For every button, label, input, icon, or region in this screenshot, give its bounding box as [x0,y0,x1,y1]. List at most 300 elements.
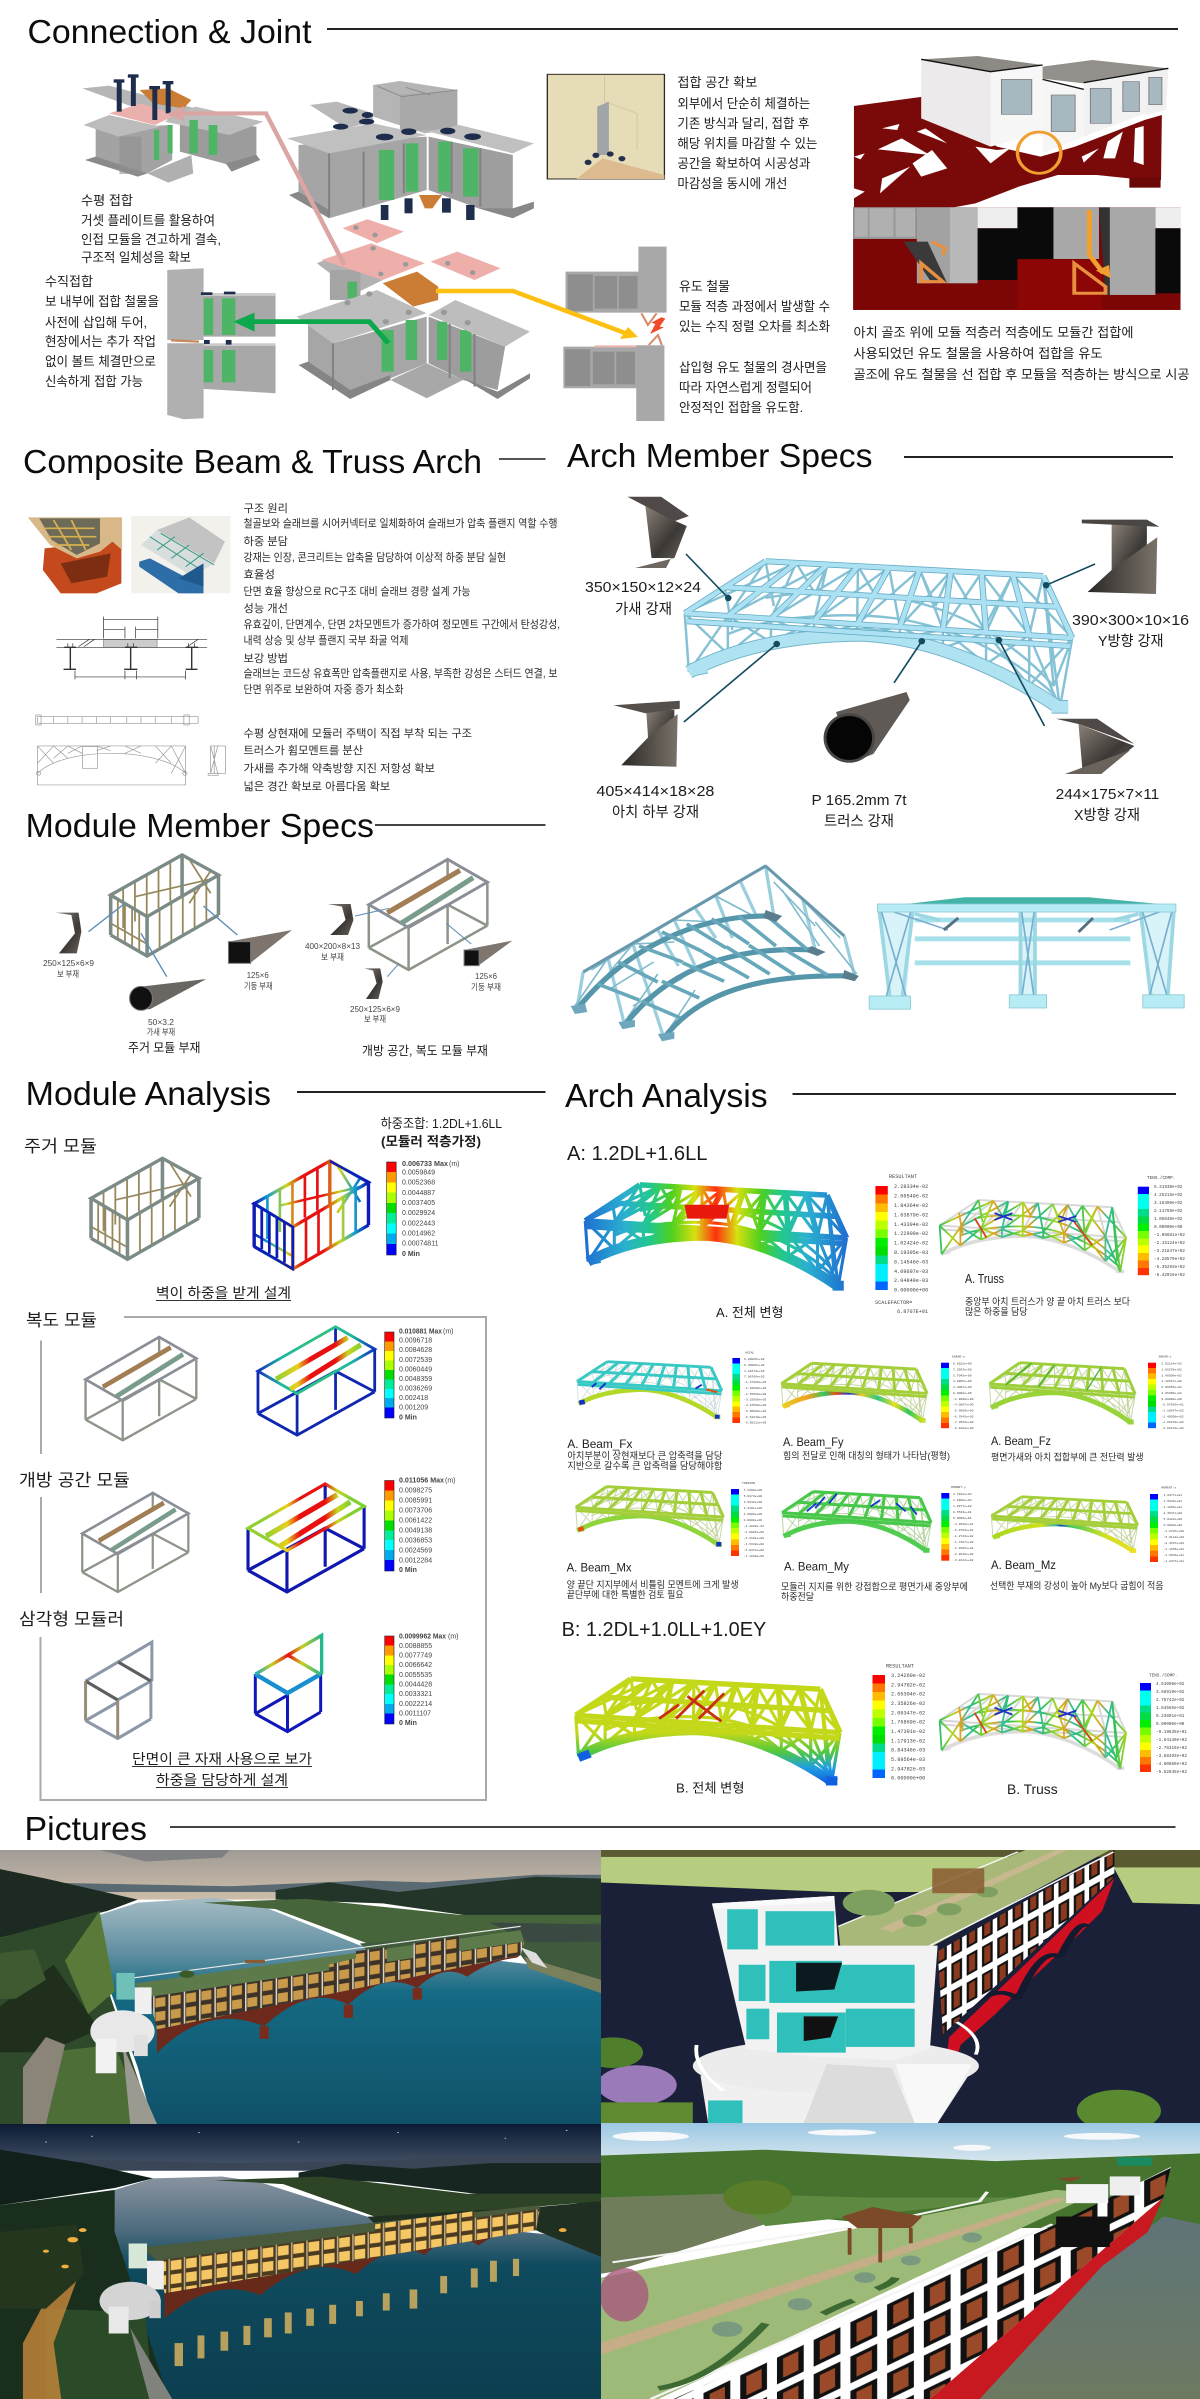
caption: B overall: B. 전체 변형 [676,1781,744,1796]
legend: corridor module: 0.0048359 [399,1376,432,1383]
legend: beam My: -3.8412e+02 [953,1558,974,1562]
text: composite principles: 내력 상승 및 상부 플랜지 국부 좌굴 억제 [244,634,408,647]
text: member labels: Y방향 강재 [1098,633,1164,650]
legend: residential module: 0.0014962 [402,1230,435,1238]
legend: beam Fx: 6.20895e+03 [744,1357,765,1361]
legend: open space module [385,1478,456,1574]
panel: upper exploded joint [287,81,534,220]
text: beam My: 하중전달 [781,1591,814,1603]
legend: residential module: 0.00074811 [402,1240,439,1248]
legend: beam Mx: -5.9374e+00 [744,1548,764,1552]
text: residential member labels: 50×3.2 [148,1017,174,1027]
text: member labels: 405×414×18×28 [596,784,714,800]
text: beam Fx: A. Beam_Fx [567,1437,632,1451]
legend: B truss: -4.60669e+02 [1156,1762,1187,1767]
legend: open space module: 0.011056 Max [399,1478,444,1484]
legend: beam Fy: 5.7045e+00 [953,1374,972,1378]
chart: corridor module deformation [258,1327,375,1435]
image: composite deck blue beam [131,516,230,593]
legend: residential module: (m) [449,1161,460,1168]
icon: residential column section [228,930,292,963]
legend: beam My: MOMENT-y [951,1485,966,1489]
legend: A overall: 2.04849e-03 [894,1278,928,1284]
text: member labels: 350×150×12×24 [585,580,701,596]
legend: corridor module: 0.001209 [399,1404,428,1412]
text: member labels: P 165.2mm 7t [812,793,906,809]
legend: open space module: 0.0036853 [399,1538,432,1544]
legend: B truss: -9.19635e+01 [1156,1730,1187,1735]
legend: B overall: 3.24260e-02 [891,1673,925,1679]
text: member labels: 아치 하부 강재 [612,804,699,821]
legend: corridor module: 0.010881 Max [399,1328,442,1336]
text: arch module stacking: 사용되었던 유도 철물을 사용하여 접합을 유도 [854,346,1103,361]
chart: beam Mz [991,1497,1138,1551]
legend: beam Fz [1148,1354,1184,1430]
legend: B overall: 5.89564e-03 [891,1757,925,1763]
chart: beam My [782,1492,931,1551]
legend: beam Fz: SHEAR-z [1158,1354,1172,1358]
legend: corridor module: 0.0084628 [399,1347,432,1354]
text: residential member labels: 기둥 부재 [244,981,273,991]
legend: B truss: -5.52845e+02 [1156,1770,1187,1775]
legend: residential module [387,1161,460,1258]
legend: beam Mz: -1.6707e+00 [1164,1529,1184,1533]
panel: horizontal joint model with bolts [82,74,263,183]
text: residential member labels: 보 부재 [57,969,79,979]
legend: beam My: -1.2743e+02 [953,1534,974,1538]
text: joint space [677,75,817,191]
legend: beam Fy: 4.0965e+00 [953,1379,972,1383]
leader lines to members [684,554,1095,726]
legend: A overall: RESULTANT [889,1174,917,1180]
chart: arch truss model [685,561,1072,708]
label: corridor module: 복도 모듈 [26,1311,97,1330]
legend: beam My: -2.3305e+02 [953,1546,974,1550]
legend: beam Fx: 7.08700e+02 [744,1374,765,1378]
legend: triangular module: 0 Min [399,1720,417,1727]
legend: beam Fy: 8.8182e+00 [953,1362,972,1366]
legend: corridor module: 0.0036269 [399,1386,432,1392]
legend: beam Fz: 0.00000e+00 [1161,1397,1182,1401]
legend: triangular module: (m) [448,1634,458,1640]
text: beam Mz: A. Beam_Mz [991,1558,1056,1572]
legend: beam Mx: -3.3101e+00 [744,1536,764,1540]
text: beam Fx: 아치부분이 상현재보다 큰 압축력을 담당 [567,1450,723,1462]
open module leaders [355,908,471,977]
text: guide fitting: 있는 수직 정렬 오차를 최소화 [679,319,830,334]
diagram: composite section [56,617,207,679]
legend: A truss: -6.42016e+02 [1154,1273,1185,1278]
legend: open space module: 0.0085991 [399,1498,432,1504]
icon: member 350x150 section [628,497,689,568]
legend: beam Fx [732,1350,766,1424]
legend: beam Fz: -1.40508e+02 [1161,1414,1184,1418]
legend: B truss: 3.68919e+02 [1156,1690,1185,1695]
legend: triangular module: 0.0033321 [399,1691,432,1698]
legend: A overall: 0.00000e+00 [894,1288,928,1294]
legend: B truss: TENS./COMP. [1149,1674,1177,1678]
chart: beam Fy [781,1363,927,1421]
image: night aerial view of bridge [0,2124,601,2399]
text: guide fitting: 따라 자연스럽게 정렬되어 [679,380,812,395]
chart: open space module model [82,1493,188,1592]
text: vertical joint: 없이 볼트 체결만으로 [45,354,156,369]
legend: beam Mz [1150,1486,1184,1563]
legend: open space module: (m) [445,1478,456,1484]
legend: beam Mz: -8.3537e+00 [1164,1541,1184,1545]
text: beam Fy: A. Beam_Fy [783,1435,844,1449]
legend: A truss: -2.15124e+02 [1154,1241,1185,1246]
text: member labels: 트러스 강재 [824,813,894,830]
legend: B truss: -2.76316e+02 [1156,1746,1187,1751]
legend: beam Fx: -3.15900e+03 [744,1398,766,1402]
legend: beam Fz: 6.95565e+01 [1161,1385,1182,1389]
arrow: green pin [233,313,388,343]
text: composite principles: 하중 분담 [244,534,288,548]
text: beam Fx [567,1437,723,1472]
legend: beam Mx: -1.8905e+00 [744,1530,764,1534]
chart: arch underside view [571,866,859,1041]
text: vertical joint: 신속하게 접합 가능 [45,374,143,389]
text: beam Mx: A. Beam_Mx [567,1561,632,1575]
heading: Arch Analysis: Arch Analysis [565,1077,768,1114]
text: beam Mz [990,1558,1164,1592]
legend: beam Fx: -1.37460e+03 [744,1380,766,1384]
text: guide fitting: 유도 철물 [679,279,730,294]
panel: gusset plates and lower joint [297,219,530,399]
text: member labels: 244×175×7×11 [1056,787,1159,803]
legend: beam My: -1.7387e+02 [953,1540,974,1544]
icon: open module column section [464,941,512,966]
legend: A overall [875,1174,928,1315]
text: member labels: 가새 강재 [615,601,672,618]
legend: A overall: 1.43394e-02 [894,1222,928,1228]
chart: open space module frame [369,859,487,970]
legend: beam Mz: 0.0000e+00 [1164,1523,1182,1527]
text: joint space: 마감성을 동시에 개선 [677,176,787,191]
chart: triangular module deformation [255,1635,322,1732]
chart: beam Fz [989,1363,1135,1422]
text: beam Fz: A. Beam_Fz [991,1434,1051,1448]
legend: beam Fy: -8.8182e+00 [953,1426,974,1430]
legend: beam Mx: 7.1209e+00 [744,1488,762,1492]
legend: open space module: 0.0012284 [399,1558,432,1564]
chart: A truss forces [940,1200,1126,1272]
text: joint space: 접합 공간 확보 [677,75,757,90]
legend: beam Fy: 7.3593e+00 [953,1368,972,1372]
image: render view along roof garden [601,2123,1200,2399]
text: truss arch notes: 트러스가 휨모멘트를 분산 [244,744,363,757]
legend: B truss [1140,1674,1187,1775]
legend: open space module: 0.0073706 [399,1508,432,1514]
legend: triangular module: 0.0044428 [399,1682,432,1688]
text: beam Mx: 양 끝단 지지부에서 비틀림 모멘트에 크게 발생 [567,1579,739,1591]
heading: Arch Member Specs: Arch Member Specs [567,437,872,474]
legend: A truss [1138,1176,1185,1278]
legend: A truss: 1.05040e+02 [1154,1217,1183,1222]
text: composite principles: 효율성 [244,568,275,581]
legend: A truss: 5.31930e+02 [1154,1185,1183,1190]
text: open module labels: 보 부재 [321,952,344,962]
legend: triangular module: 0.0066642 [399,1662,432,1669]
chart: corridor module model [86,1337,196,1440]
image: composite deck red beam [28,517,122,593]
legend: beam Mx: -4.5348e+00 [744,1542,764,1546]
chart: triangular module model [86,1642,152,1739]
chart: beam Mx [576,1487,723,1545]
diagram: truss arch plan and elevation [36,715,226,785]
legend: beam Fx: -4.87500e+03 [744,1403,766,1407]
legend: corridor module: 0 Min [399,1414,417,1422]
legend: B overall: 8.84346e-03 [891,1748,925,1754]
legend: A overall: 4.09697e-03 [894,1269,928,1275]
residential leaders [89,903,237,977]
caption: large section reinforcement [132,1751,312,1788]
legend: beam Mx: 0.0000e+00 [744,1518,762,1522]
heading: Connection & Joint: Connection & Joint [28,13,312,50]
image: dusk aerial view of bridge [0,1850,601,2124]
legend: B truss: 1.84565e+02 [1156,1706,1185,1711]
legend: A truss: 3.18490e+02 [1154,1201,1183,1206]
text: arch module stacking: 아치 골조 위에 모듈 적층러 적층에도 모듈간 접합에 [854,325,1134,340]
legend: beam Fz: 1.40508e+02 [1161,1374,1182,1378]
legend: A truss: -1.06681e+02 [1154,1233,1185,1238]
chart: B truss forces [940,1694,1126,1769]
text: A truss note: 중앙부 아치 트러스가 양 끝 아치 트러스 보다 [965,1296,1130,1308]
text: member labels [585,580,1189,830]
text: truss arch notes: 수평 상현재에 모듈러 주택이 직접 부착 되는 구조 [244,727,472,740]
text: beam Fz: 평면가새와 아치 접합부에 큰 전단력 발생 [991,1452,1144,1464]
legend: beam Fx: -6.51810e+03 [744,1415,766,1419]
legend: A overall: 1.63879e-02 [894,1212,928,1218]
legend: beam Fy: -5.3960e+00 [953,1408,974,1412]
text: load combination: (모듈러 적층가정) [381,1134,481,1149]
legend: beam Fy: SHEAR-y [952,1354,965,1358]
panel: guide fitting closeups [853,207,1181,310]
legend: B overall: 2.06347e-02 [891,1710,925,1716]
legend: residential module: 0.0052368 [402,1180,435,1186]
text: open module labels: 125×6 [475,971,497,981]
legend: beam Fy: -6.7045e+00 [953,1414,974,1418]
text: composite principles: 단면 효율 향상으로 RC구조 대비 슬래브 경량 설계 가능 [244,585,470,598]
legend: A overall: 2.06549e-02 [894,1194,928,1200]
legend: A overall: 8.19395e-03 [894,1250,928,1256]
legend: beam Mx: TORSION [742,1481,755,1485]
text: joint space: 외부에서 단순히 체결하는 [677,96,810,111]
caption: A overall: A. 전체 변형 [716,1305,784,1320]
text: composite principles: 성능 개선 [244,602,288,615]
text: guide fitting: 모듈 적층 과정에서 발생할 수 [679,299,830,314]
icon: residential beam section [55,913,81,953]
legend: A overall: 1.02424e-02 [894,1241,928,1247]
text: open module labels: 400×200×8×13 [305,941,360,951]
caption: large section reinforcement: 하중을 담당하게 설계 [156,1772,288,1788]
legend: beam Mx: 1.8905e+00 [744,1512,762,1516]
legend: A truss: 2.11769e+02 [1154,1209,1183,1214]
legend: beam My: -2.8640e+02 [953,1552,974,1556]
legend: beam My: 8.5533e+01 [953,1510,972,1514]
legend: triangular module: 0.0055535 [399,1672,432,1679]
text: composite principles: 철골보와 슬래브를 시어커넥터로 일체화하여 슬래브가 압축 플랜지 역할 수행 [244,516,558,530]
legend: open space module: 0.0049138 [399,1528,432,1534]
legend: beam My: 1.7162e+02 [953,1492,972,1496]
text: arch module stacking [854,325,1190,382]
icon: open module beam section lower [364,968,383,999]
text: member labels: 390×300×10×16 [1072,613,1189,629]
legend: A truss: 0.00000e+00 [1154,1225,1183,1230]
text: composite principles: 보강 방법 [244,652,288,665]
legend: beam Fy: -4.0507e+00 [953,1402,974,1406]
legend: open space module: 0.0061422 [399,1518,432,1524]
arrow: pink gusset [166,106,344,265]
legend: triangular module: 0.0077749 [399,1652,432,1660]
icon: member 405x414 section [613,701,680,767]
legend: B overall: 0.00000e+00 [891,1776,925,1782]
label: open space module: 개방 공간 모듈 [19,1471,130,1490]
legend: beam Fy [941,1354,974,1430]
legend: beam Fx: 5.36095e+03 [744,1363,765,1367]
legend: beam Mz: -1.1695e+01 [1164,1547,1184,1551]
icon: residential brace section [130,979,206,1010]
legend: corridor module: (m) [443,1328,454,1336]
subheading: load case B: B: 1.2DL+1.0LL+1.0EY [562,1619,766,1641]
legend: B truss: 9.23891e+01 [1156,1714,1185,1719]
text: beam My [781,1560,968,1603]
legend: beam Mz: 8.3537e+00 [1164,1511,1182,1515]
text: horizontal joint: 인접 모듈을 견고하게 결속, [81,232,221,247]
panel: interior finish inset [547,74,664,179]
legend: beam Fz: -2.02114e+02 [1161,1426,1184,1430]
text: beam Mx: 끝단부에 대한 특별한 검토 필요 [567,1589,684,1601]
legend: B overall: 2.94782e-02 [891,1682,925,1688]
legend: A truss: TENS./COMP. [1147,1176,1175,1181]
text: joint space: 해당 위치를 마감할 수 있는 [677,136,817,151]
text: beam Fx: 지반으로 갈수록 큰 압축력을 담당해야함 [567,1460,723,1472]
legend: beam Fy: 0.0000e+00 [953,1391,972,1395]
legend: A truss: -3.21847e+02 [1154,1249,1185,1254]
chart: residential module frame [111,855,218,956]
legend: beam Fy: -1.8800e+00 [953,1397,974,1401]
legend: beam Fz: 1.10547e+02 [1161,1379,1182,1383]
legend: residential module: 0.0037405 [402,1200,435,1207]
legend: A overall: 1.84364e-02 [894,1203,928,1209]
legend: residential module: 0.0044887 [402,1190,435,1197]
chart: A overall deformation [585,1185,847,1287]
text: truss arch notes: 넓은 경간 확보로 아름다움 확보 [244,780,390,793]
legend: B overall: 2.65304e-02 [891,1692,925,1698]
legend: triangular module: 0.0011107 [399,1710,431,1718]
legend: residential module: 0.0059849 [402,1170,435,1176]
text: load combination [381,1116,502,1149]
text: residential member labels: 250×125×6×9 [43,958,94,968]
legend: beam My: -5.8793e+01 [953,1528,974,1532]
legend: beam Fz: -6.97565e+01 [1161,1402,1184,1406]
legend: A truss: -5.35293e+02 [1154,1265,1185,1270]
text: residential member labels: 주거 모듈 부재 [128,1041,200,1055]
legend: triangular module: 0.0099962 Max [399,1634,446,1640]
text: composite principles [244,502,560,696]
legend: beam My: 1.2866e+02 [953,1498,972,1502]
text: guide fitting [679,279,830,415]
panel: guide fitting section diagram [563,247,667,421]
legend: B overall: 2.94782e-03 [891,1766,925,1772]
legend: beam My: 5.0000e+01 [953,1516,972,1520]
legend: beam Mx: 5.9374e+00 [744,1494,762,1498]
legend: A overall: 6.8707E+01 [897,1309,928,1315]
legend: open space module: 0.0024569 [399,1548,432,1554]
legend: B truss: 0.00000e+00 [1156,1722,1185,1727]
text: residential member labels [43,958,273,1055]
legend: residential module: 0 Min [402,1251,420,1258]
chart: B overall deformation [576,1679,840,1782]
text: beam Fz [991,1434,1144,1464]
legend: B overall: 1.76869e-02 [891,1720,925,1726]
arrow: yellow guide [436,291,638,339]
text: open module labels: 250×125×6×9 [350,1004,400,1014]
text: open module labels: 기둥 부재 [471,982,501,992]
legend: beam Mx: -7.1209e+00 [744,1554,764,1558]
legend: corridor module: 0.0072539 [399,1357,432,1364]
legend: B overall: 1.47391e-02 [891,1729,925,1735]
legend: beam Mx: -4.4888e-01 [744,1524,764,1528]
chart: beam Fx [577,1362,722,1417]
legend: A overall: 6.14546e-03 [894,1259,928,1265]
legend: beam Mz: 1.1695e+01 [1164,1505,1182,1509]
legend: beam Mz: MOMENT-z [1161,1486,1176,1490]
text: composite principles: 유효깊이, 단면계수, 단면 2차모멘트가 증가하여 정모멘트 구간에서 탄성강성, [244,617,560,631]
text: arch module stacking: 골조에 유도 철물을 선 접합 후 모듈을 적층하는 방식으로 시공 [854,367,1190,382]
text: residential member labels: 125×6 [247,970,269,980]
label: triangular module: 삼각형 모듈러 [19,1610,124,1629]
text: horizontal joint [81,193,221,265]
legend: beam Mz: -1.8377e+01 [1164,1559,1184,1563]
text: open module labels: 보 부재 [364,1014,386,1024]
panel: module analysis frame border [40,1317,486,1800]
legend: beam Mx [731,1481,764,1558]
icon: open module beam section [328,904,353,935]
text: A truss note: A. Truss [965,1271,1004,1286]
text: horizontal joint: 거셋 플레이트를 활용하여 [81,213,215,228]
legend: open space module: 0.0098275 [399,1488,432,1494]
legend: B truss: -3.68493e+02 [1156,1754,1187,1759]
legend: corridor module: 0.0096718 [399,1338,432,1344]
legend: beam Mx: 3.3101e+00 [744,1506,762,1510]
heading: Module Analysis: Module Analysis [26,1075,271,1112]
legend: beam My [941,1485,974,1562]
text: vertical joint [45,274,159,389]
legend: beam Fx: -1.46800e+03 [744,1386,766,1390]
legend: triangular module: 0.0088855 [399,1643,432,1650]
legend: corridor module: 0.002418 [399,1395,428,1402]
legend: A overall: SCALEFACTOR= [875,1300,912,1306]
heading: Composite Beam & Truss Arch: Composite Beam & Truss Arch [23,443,482,480]
legend: beam Fx: -6.98211e+03 [744,1420,766,1424]
legend: open space module: 0 Min [399,1567,417,1574]
text: composite principles: 단면 위주로 보완하여 자중 증가 최소화 [244,682,404,696]
legend: beam Mz: 5.0122e+00 [1164,1517,1182,1521]
legend: beam Mz: -1.5036e+01 [1164,1553,1184,1557]
legend: triangular module [385,1634,458,1727]
panel: module on arch render [854,56,1168,207]
text: load combination: 하중조합: 1.2DL+1.6LL [381,1116,502,1131]
legend: B overall [872,1664,925,1782]
text: beam Mz: 선택한 부재의 강성이 높아 My보다 굽힘이 적음 [990,1580,1164,1592]
legend: A overall: 1.22909e-02 [894,1231,928,1237]
legend: triangular module: 0.0022214 [399,1701,432,1708]
image: render view with glass tower [601,1850,1200,2123]
text: member labels: X방향 강재 [1074,807,1140,824]
text: vertical joint: 사전에 삽입해 두어, [45,315,147,330]
